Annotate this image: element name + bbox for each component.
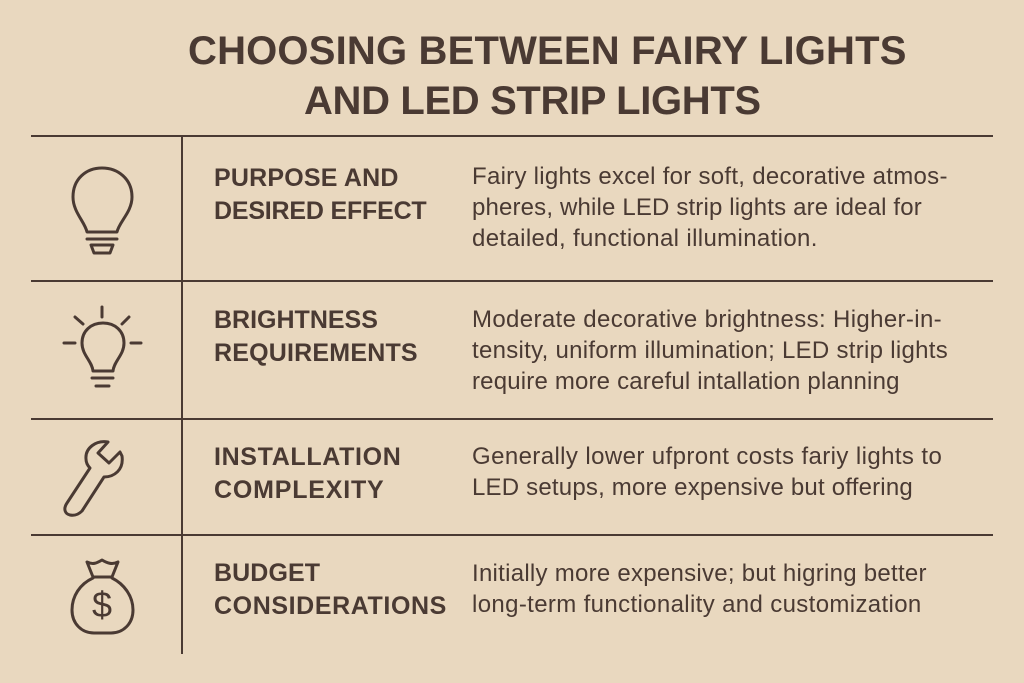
row text: purpose: Fairy lights excel for soft, decorative atmos-	[472, 163, 948, 190]
row heading: purpose: DESIRED EFFECT	[214, 197, 426, 225]
icon: money bag	[70, 558, 134, 634]
icon: money bag: $	[92, 584, 112, 625]
row text: installation: LED setups, more expensive but offering	[472, 474, 913, 501]
row text: installation	[472, 443, 942, 501]
title: CHOOSING BETWEEN FAIRY LIGHTS	[188, 29, 907, 73]
row text: brightness	[472, 306, 948, 395]
row heading: installation: INSTALLATION	[214, 443, 401, 471]
row text: brightness: require more careful intallation planning	[472, 368, 900, 395]
row heading: budget: CONSIDERATIONS	[214, 592, 447, 620]
row heading: budget: BUDGET	[214, 559, 320, 587]
row text: budget	[472, 560, 927, 618]
row text: budget: Initially more expensive; but higring better	[472, 560, 927, 587]
row heading: brightness	[214, 306, 418, 367]
title	[188, 29, 907, 123]
row heading: installation: COMPLEXITY	[214, 476, 385, 504]
row text: budget: long-term functionality and customization	[472, 591, 922, 618]
row text: brightness: tensity, uniform illumination; LED strip lights	[472, 337, 948, 364]
row heading: brightness: BRIGHTNESS	[214, 306, 378, 334]
row heading: brightness: REQUIREMENTS	[214, 339, 418, 367]
icon: glowing bulb	[62, 306, 142, 388]
row text: brightness: Moderate decorative brightness: Higher-in-	[472, 306, 942, 333]
row heading: purpose: PURPOSE AND	[214, 164, 399, 192]
icon: light bulb	[72, 166, 134, 254]
icon: wrench	[63, 440, 124, 517]
row heading: budget	[214, 559, 447, 620]
row text: purpose: detailed, functional illumination.	[472, 225, 818, 252]
row text: installation: Generally lower ufpront costs fariy lights to	[472, 443, 942, 470]
row heading: purpose	[214, 164, 426, 225]
row text: purpose: pheres, while LED strip lights are ideal for	[472, 194, 922, 221]
title: AND LED STRIP LIGHTS	[304, 79, 761, 123]
row heading: installation	[214, 443, 401, 504]
row text: purpose	[472, 163, 948, 252]
